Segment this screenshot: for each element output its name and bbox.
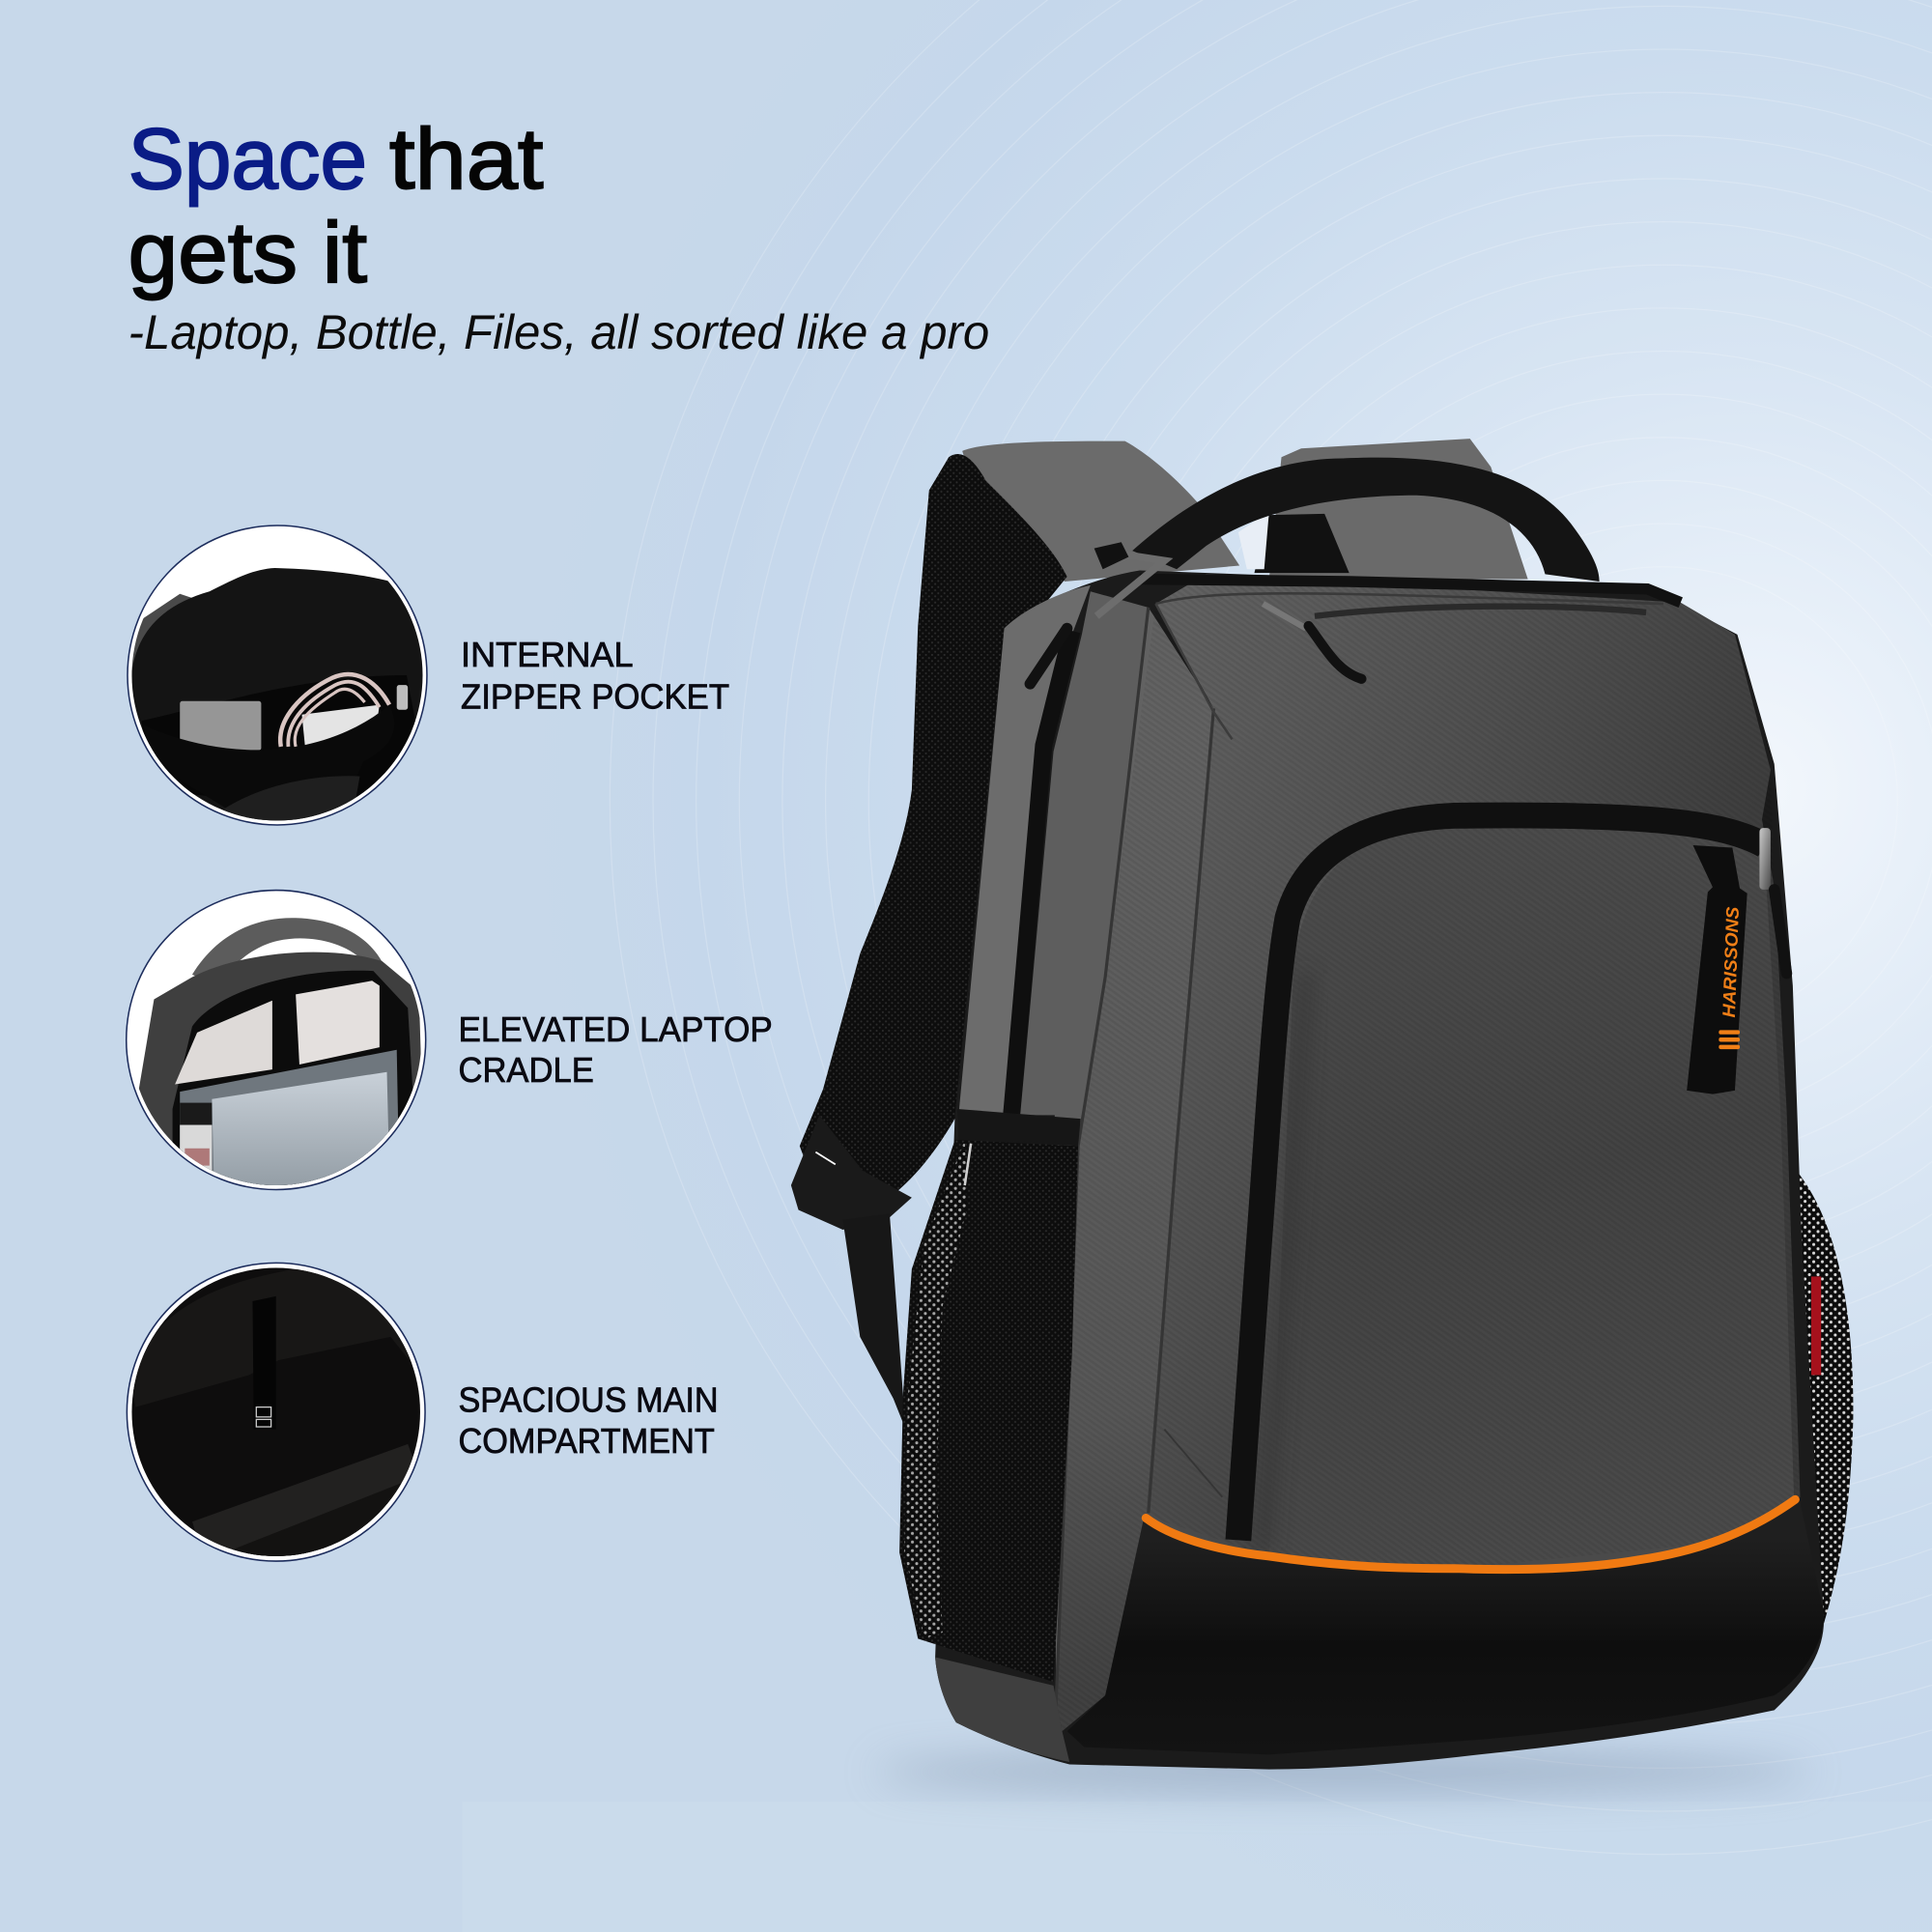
photo circle: internal zipper pocket <box>124 526 427 838</box>
label: internal zipper pocket <box>461 636 729 716</box>
front pocket panel <box>1269 819 1794 1570</box>
orange piping <box>1146 1499 1795 1570</box>
pocket zipper <box>1238 815 1765 1540</box>
label: spacious main compartment: SPACIOUS MAIN <box>458 1381 719 1420</box>
left mesh pocket <box>899 1109 1081 1682</box>
document folder <box>180 1049 398 1185</box>
right mesh pocket <box>1797 1171 1853 1633</box>
label: elevated laptop cradle: CRADLE <box>458 1051 594 1090</box>
panel seams <box>1056 608 1222 1707</box>
label: spacious main compartment <box>458 1381 719 1461</box>
pocket lip <box>143 705 394 813</box>
pocket zipper shadow <box>1263 974 1306 1547</box>
laptop <box>175 980 380 1084</box>
backpack <box>791 439 1853 1792</box>
photo circle: elevated laptop cradle <box>127 891 426 1213</box>
subtitle: -Laptop, Bottle, Files, all sorted like a pro <box>128 305 989 359</box>
rear side panel <box>958 585 1091 1115</box>
label: internal zipper pocket: ZIPPER POCKET <box>461 677 729 716</box>
side panel <box>1020 591 1149 1713</box>
brand pull tab <box>1687 845 1747 1094</box>
feature: elevated laptop cradle <box>127 891 773 1213</box>
zipper stripe <box>1011 631 1072 1115</box>
front upper panel <box>1146 574 1801 1570</box>
label: spacious main compartment: COMPARTMENT <box>458 1422 715 1461</box>
power bank <box>180 701 261 751</box>
bag body base <box>935 571 1824 1770</box>
label: internal zipper pocket: INTERNAL <box>461 636 634 674</box>
photo circle: spacious main compartment <box>124 1257 431 1577</box>
right shoulder strap <box>1238 439 1528 579</box>
brand logo mark <box>1719 1030 1740 1049</box>
left shoulder strap <box>791 441 1239 1430</box>
side gusset <box>1056 608 1213 1731</box>
red tag <box>1811 1276 1821 1375</box>
feature: internal zipper pocket <box>124 526 729 838</box>
title <box>128 110 544 300</box>
label: elevated laptop cradle <box>458 1010 773 1090</box>
fabric weave <box>1056 574 1801 1731</box>
top handle <box>1132 458 1600 582</box>
bottom side panel <box>935 1658 1069 1762</box>
label: elevated laptop cradle: ELEVATED LAPTOP <box>458 1010 773 1049</box>
brand pull tab: HARISSONS <box>1719 906 1743 1018</box>
title: gets it <box>128 204 367 300</box>
feature: spacious main compartment <box>124 1257 719 1577</box>
top zipper band <box>1140 579 1681 739</box>
lower webbing and buckle <box>791 1115 912 1430</box>
title: that <box>389 110 544 207</box>
zipper pulls <box>1030 542 1786 974</box>
black base panel <box>1067 1497 1824 1754</box>
charger and cable <box>280 674 389 752</box>
title: Space <box>128 110 367 207</box>
